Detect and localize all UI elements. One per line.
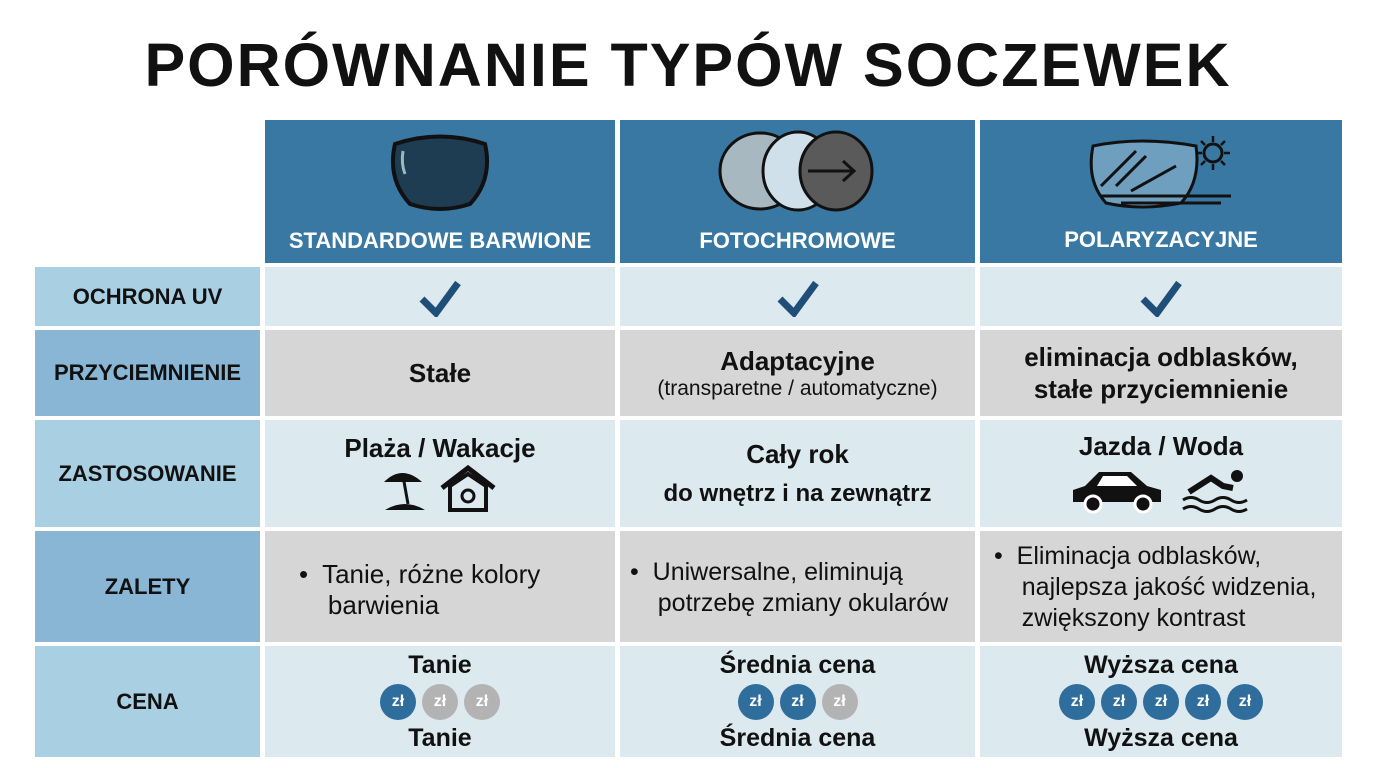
text: (transparetne / automatyczne) (657, 376, 938, 400)
row: zalety: • Tanie, różne kolory (299, 559, 540, 589)
text: zł (1197, 692, 1209, 710)
text: • Uniwersalne, eliminują (630, 558, 903, 586)
text: zł (1239, 692, 1251, 710)
text: potrzebę zmiany okularów (658, 589, 948, 617)
text: CENA (116, 688, 179, 714)
text: Średnia cena (720, 650, 875, 678)
icons: car and swimmer (1073, 470, 1248, 514)
row: zalety: barwienia (328, 590, 439, 620)
text: Wyższa cena (1084, 650, 1238, 678)
row: cena: zł (392, 692, 404, 710)
icon: polarized lens with sun (1090, 136, 1231, 208)
icon: photochromic lenses (718, 130, 874, 212)
header: standardowe barwione (265, 120, 615, 263)
text: eliminacja odblasków, (1024, 342, 1298, 372)
row: UV checkmarks (265, 267, 615, 326)
text: Wyższa cena (1084, 724, 1238, 752)
text: ZALETY (105, 574, 190, 598)
text: Jazda / Woda (1079, 431, 1243, 461)
row: cena: zł (434, 692, 446, 710)
header: polaryzacyjne: POLARYZACYJNE (1064, 226, 1258, 252)
text: ZASTOSOWANIE (58, 460, 237, 486)
header: polaryzacyjne (980, 120, 1342, 263)
header: fotochromowe: FOTOCHROMOWE (699, 228, 896, 253)
row: zastosowanie: Plaża / Wakacje (344, 433, 536, 463)
row: cena: Tanie (408, 724, 472, 752)
text: zł (749, 692, 762, 710)
row: zalety (265, 531, 615, 642)
text: stałe przyciemnienie (1034, 374, 1288, 404)
row: cena (265, 646, 615, 757)
text: zwiększony kontrast (1022, 604, 1245, 632)
row: zastosowanie (265, 420, 615, 527)
header: standardowe barwione: STANDARDOWE BARWIONE (289, 228, 591, 253)
row: cena: zł (476, 692, 488, 710)
row: przyciemnienie: Stałe (409, 358, 471, 388)
row: cena: Tanie (408, 650, 472, 678)
text: • Eliminacja odblasków, (994, 542, 1261, 570)
title: PORÓWNANIE TYPÓW SOCZEWEK (144, 31, 1232, 99)
text: do wnętrz i na zewnątrz (663, 480, 932, 507)
row labels (35, 267, 260, 326)
row: przyciemnienie (265, 330, 615, 416)
text: Cały rok (746, 439, 849, 469)
row labels: OCHRONA UV (73, 284, 222, 308)
text: Adaptacyjne (720, 346, 875, 376)
text: zł (1071, 692, 1083, 710)
header: fotochromowe (620, 120, 975, 263)
text: najlepsza jakość widzenia, (1022, 573, 1316, 601)
text: zł (791, 692, 804, 710)
text: Średnia cena (720, 724, 875, 752)
icons: umbrella and house (384, 464, 496, 512)
text: zł (1113, 692, 1125, 710)
text: zł (833, 692, 846, 710)
icon: tinted lens (390, 134, 490, 211)
text: zł (1155, 692, 1167, 710)
text: PRZYCIEMNIENIE (54, 360, 241, 385)
